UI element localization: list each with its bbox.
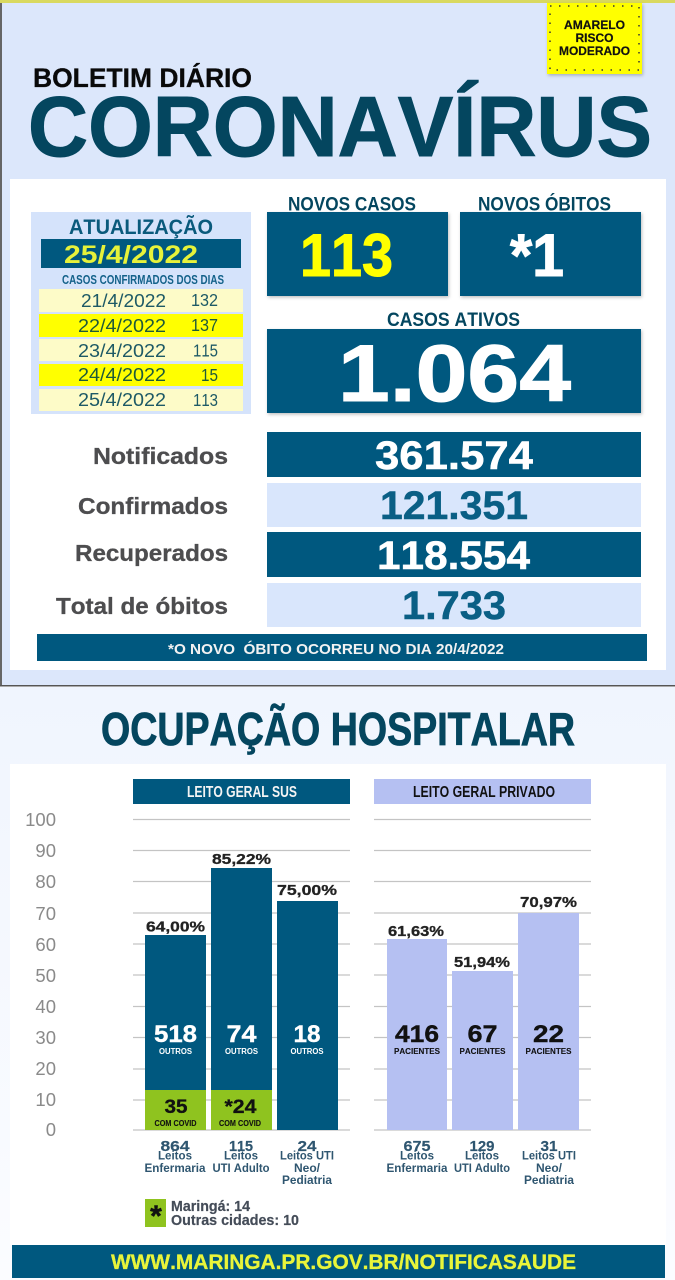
bar: SUS UTI adulto: [211, 852, 272, 1175]
y axis: 60: [35, 934, 56, 955]
row 24/4: [39, 364, 243, 386]
bar: SUS enfermaria: 518: [154, 1021, 197, 1048]
active cases: 1.064: [338, 329, 571, 419]
stat: recuperados: Recuperados: [75, 540, 228, 566]
bar: private UTI neo: Leitos UTI: [522, 1148, 576, 1162]
y axis: 30: [35, 1027, 56, 1048]
bar: private enfermaria: Leitos: [400, 1148, 434, 1162]
bar: SUS enfermaria: Enfermaria: [144, 1161, 206, 1175]
row 22/4: 137: [191, 315, 218, 335]
footnote bar: *O NOVO ÓBITO OCORREU NO DIA 20/4/2022: [168, 640, 504, 658]
panel: chart area: [10, 764, 666, 1245]
bar: SUS UTI neo: 18: [294, 1021, 320, 1048]
bar: SUS UTI adulto: Leitos: [224, 1148, 258, 1162]
y axis: 0: [46, 1119, 56, 1140]
y axis: 100: [25, 809, 56, 830]
bar: private UTI neo: PACIENTES: [526, 1047, 572, 1056]
stat: recuperados: [75, 532, 641, 578]
header: SUS: [133, 779, 350, 804]
stat: recuperados: 118.554: [377, 534, 531, 578]
panel: update box: [31, 212, 251, 414]
bar: SUS enfermaria: 864: [160, 1139, 190, 1155]
bar: private enfermaria: 416: [395, 1021, 439, 1048]
row 22/4: 22/4/2022: [78, 316, 166, 336]
y axis: [25, 809, 56, 1140]
bar: SUS UTI neo: 75,00%: [277, 883, 337, 899]
bar: private UTI adulto: UTI Adulto: [454, 1161, 510, 1175]
bar: SUS UTI adulto: COM COVID: [219, 1119, 261, 1128]
bar: private UTI adulto: 67: [468, 1021, 498, 1048]
active cases: [267, 309, 641, 419]
bar: SUS enfermaria: [144, 920, 206, 1175]
panel: hospital occupancy: [0, 687, 675, 1280]
row 23/4: 23/4/2022: [78, 341, 166, 361]
y axis: 50: [35, 965, 56, 986]
bar: private UTI neo: Neo/: [536, 1161, 563, 1175]
bar: private UTI adulto: PACIENTES: [460, 1047, 506, 1056]
panel: daily bulletin: [0, 0, 675, 686]
row 25/4: 25/4/2022: [78, 390, 166, 410]
header: private: [374, 779, 591, 804]
new deaths: *1: [510, 222, 564, 289]
y axis: 90: [35, 840, 56, 861]
y axis: 70: [35, 903, 56, 924]
bar: SUS enfermaria: OUTROS: [159, 1047, 193, 1056]
bar: SUS enfermaria: 64,00%: [146, 920, 205, 936]
row 21/4: [39, 289, 243, 312]
bar: SUS enfermaria: 35: [164, 1097, 188, 1118]
bar: private UTI neo: [518, 895, 579, 1187]
hospital heading: OCUPAÇÃO HOSPITALAR: [101, 703, 575, 755]
bar: SUS UTI adulto: UTI Adulto: [212, 1161, 270, 1175]
risk badge: MODERADO: [559, 44, 630, 58]
row 22/4: [39, 314, 243, 337]
bar: private UTI neo: 70,97%: [520, 895, 577, 911]
stat: notificados: 361.574: [375, 434, 534, 478]
legend: *: [150, 1200, 162, 1233]
stat: total de obitos: [56, 583, 641, 628]
row 25/4: [39, 389, 243, 411]
update date: [41, 239, 241, 269]
bar: private enfermaria: 61,63%: [388, 924, 444, 940]
footnote bar: [37, 634, 647, 661]
stat: notificados: Notificados: [93, 443, 228, 469]
new cases: 113: [300, 222, 393, 289]
bar: SUS UTI adulto: *24: [224, 1097, 257, 1118]
active cases: CASOS ATIVOS: [387, 309, 520, 331]
new cases: [267, 194, 448, 296]
stat: confirmados: 121.351: [380, 484, 528, 528]
bar: SUS UTI adulto: 74: [226, 1021, 257, 1048]
stat: notificados: [93, 432, 641, 478]
stat: confirmados: [78, 483, 641, 528]
bar: SUS UTI neo: OUTROS: [290, 1047, 324, 1056]
bar: SUS UTI adulto: OUTROS: [225, 1047, 259, 1056]
bar: SUS UTI adulto: 115: [229, 1139, 253, 1155]
bar: private enfermaria: Enfermaria: [386, 1161, 448, 1175]
bar: private UTI neo: Pediatria: [524, 1173, 574, 1187]
bar: private enfermaria: 675: [404, 1139, 430, 1155]
risk badge: [547, 3, 642, 74]
row 23/4: 115: [193, 340, 218, 360]
bar: private enfermaria: [386, 924, 448, 1175]
bar: SUS UTI neo: 24: [298, 1139, 316, 1155]
new deaths: [460, 192, 641, 296]
title: CORONAVÍRUS: [28, 80, 652, 175]
table caption: CASOS CONFIRMADOS DOS DIAS: [62, 272, 224, 287]
bar: private enfermaria: PACIENTES: [394, 1047, 441, 1056]
legend: Outras cidades: 10: [171, 1213, 299, 1229]
update heading: ATUALIZAÇÃO: [69, 216, 213, 239]
y axis: 40: [35, 996, 56, 1017]
header: private: LEITO GERAL PRIVADO: [413, 784, 555, 801]
footer link bar: [12, 1245, 665, 1278]
subtitle: BOLETIM DIÁRIO: [33, 62, 252, 93]
risk badge: RISCO: [576, 31, 614, 45]
stat: confirmados: Confirmados: [78, 493, 228, 519]
bar: SUS UTI neo: Neo/: [294, 1161, 321, 1175]
row 24/4: 15: [201, 365, 218, 385]
bar: private UTI neo: 22: [533, 1021, 564, 1048]
legend: [145, 1199, 299, 1233]
update date: 25/4/2022: [64, 241, 198, 269]
row 24/4: 24/4/2022: [78, 365, 166, 385]
bar: private UTI neo: 31: [540, 1139, 558, 1155]
row 21/4: 21/4/2022: [81, 291, 166, 311]
bar: SUS UTI neo: Pediatria: [282, 1173, 332, 1187]
bar: SUS UTI neo: [277, 883, 338, 1187]
bar: private UTI adulto: 129: [470, 1139, 494, 1155]
risk badge: AMARELO: [564, 18, 625, 32]
bar: private UTI adulto: [452, 955, 513, 1175]
bar: private UTI adulto: 51,94%: [454, 955, 510, 971]
header: SUS: LEITO GERAL SUS: [187, 784, 297, 801]
new deaths: NOVOS ÓBITOS: [478, 192, 611, 216]
bar: SUS enfermaria: Leitos: [158, 1148, 192, 1162]
stat: total de obitos: 1.733: [402, 584, 506, 628]
y axis: 20: [35, 1058, 56, 1079]
bar: SUS UTI neo: Leitos UTI: [280, 1148, 334, 1162]
row 21/4: 132: [191, 290, 218, 310]
panel: white content: [10, 179, 666, 670]
legend: Maringá: 14: [171, 1199, 250, 1215]
new cases: NOVOS CASOS: [288, 194, 416, 216]
y axis: 10: [35, 1089, 56, 1110]
footer link bar: WWW.MARINGA.PR.GOV.BR/NOTIFICASAUDE: [111, 1251, 576, 1274]
row 25/4: 113: [193, 390, 218, 410]
stat: total de obitos: Total de óbitos: [56, 593, 228, 619]
y axis: 80: [35, 871, 56, 892]
row 23/4: [39, 339, 243, 361]
bar: SUS enfermaria: COM COVID: [154, 1119, 197, 1128]
bar: SUS UTI adulto: 85,22%: [212, 852, 271, 868]
bar: private UTI adulto: Leitos: [465, 1148, 499, 1162]
